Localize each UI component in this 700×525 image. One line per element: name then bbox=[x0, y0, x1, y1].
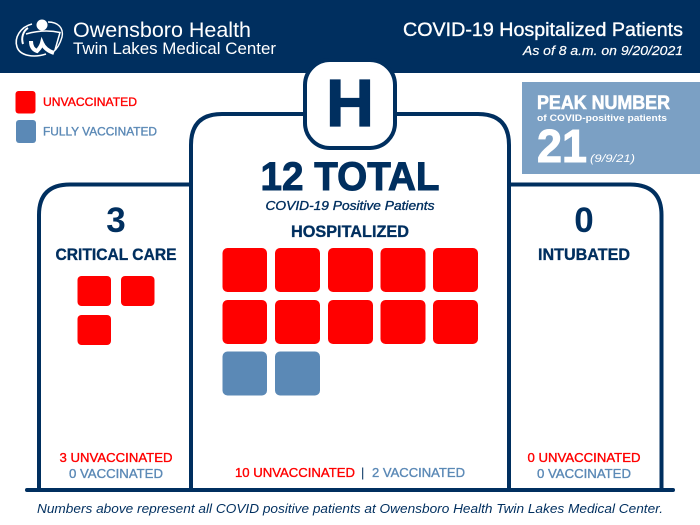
icon: hospital H badge bbox=[305, 60, 395, 148]
header title: COVID-19 Hospitalized Patients bbox=[403, 19, 683, 41]
icon: Owensboro Health logo bbox=[16, 20, 62, 56]
critical care breakdown: 3 UNVACCINATED bbox=[60, 450, 172, 465]
logo text bbox=[73, 18, 276, 58]
hospitalized squares bbox=[222, 248, 478, 396]
critical care heading: CRITICAL CARE bbox=[56, 245, 176, 264]
panel: peak number: 21 bbox=[537, 120, 587, 172]
baseline bbox=[25, 488, 675, 492]
panel: intubated bbox=[509, 184, 662, 490]
total heading: 12 TOTAL bbox=[260, 155, 440, 199]
panel: critical care bbox=[39, 184, 191, 490]
icon: hospital H badge: H bbox=[326, 66, 374, 141]
legend: unvaccinated: UNVACCINATED bbox=[43, 95, 137, 109]
panel: peak number: (9/9/21) bbox=[590, 153, 635, 165]
header title bbox=[403, 19, 683, 58]
panel: peak number bbox=[522, 82, 700, 174]
header title: As of 8 a.m. on 9/20/2021 bbox=[522, 43, 683, 58]
critical care breakdown: 0 VACCINATED bbox=[69, 466, 163, 481]
intubated heading: INTUBATED bbox=[538, 245, 630, 264]
intubated breakdown bbox=[528, 450, 640, 481]
critical care squares bbox=[78, 276, 154, 345]
legend: fully vaccinated bbox=[16, 120, 157, 143]
critical care count: 3 bbox=[106, 201, 126, 240]
panel: peak number: of COVID-positive patients bbox=[537, 113, 667, 124]
hospitalized breakdown bbox=[235, 465, 465, 480]
logo text: Twin Lakes Medical Center bbox=[73, 39, 276, 58]
hospitalized heading: HOSPITALIZED bbox=[291, 222, 409, 241]
legend bbox=[16, 91, 157, 143]
legend: fully vaccinated: FULLY VACCINATED bbox=[43, 124, 157, 138]
logo text: Owensboro Health bbox=[73, 18, 251, 42]
hospitalized breakdown: 10 UNVACCINATED bbox=[235, 465, 355, 480]
intubated breakdown: 0 UNVACCINATED bbox=[528, 450, 640, 465]
legend: unvaccinated bbox=[16, 91, 137, 114]
hospitalized breakdown: 2 VACCINATED bbox=[372, 465, 465, 480]
total subheading: COVID-19 Positive Patients bbox=[266, 199, 434, 213]
intubated count: 0 bbox=[574, 201, 594, 240]
panel: hospitalized bbox=[191, 114, 509, 490]
intubated breakdown: 0 VACCINATED bbox=[537, 466, 631, 481]
critical care breakdown bbox=[60, 450, 172, 481]
header banner bbox=[0, 0, 700, 73]
hospitalized breakdown: | bbox=[361, 465, 364, 480]
footnote: Numbers above represent all COVID positive patients at Owensboro Health Twin Lakes Medical Center. bbox=[37, 501, 663, 516]
panel: peak number: PEAK NUMBER bbox=[537, 93, 670, 114]
